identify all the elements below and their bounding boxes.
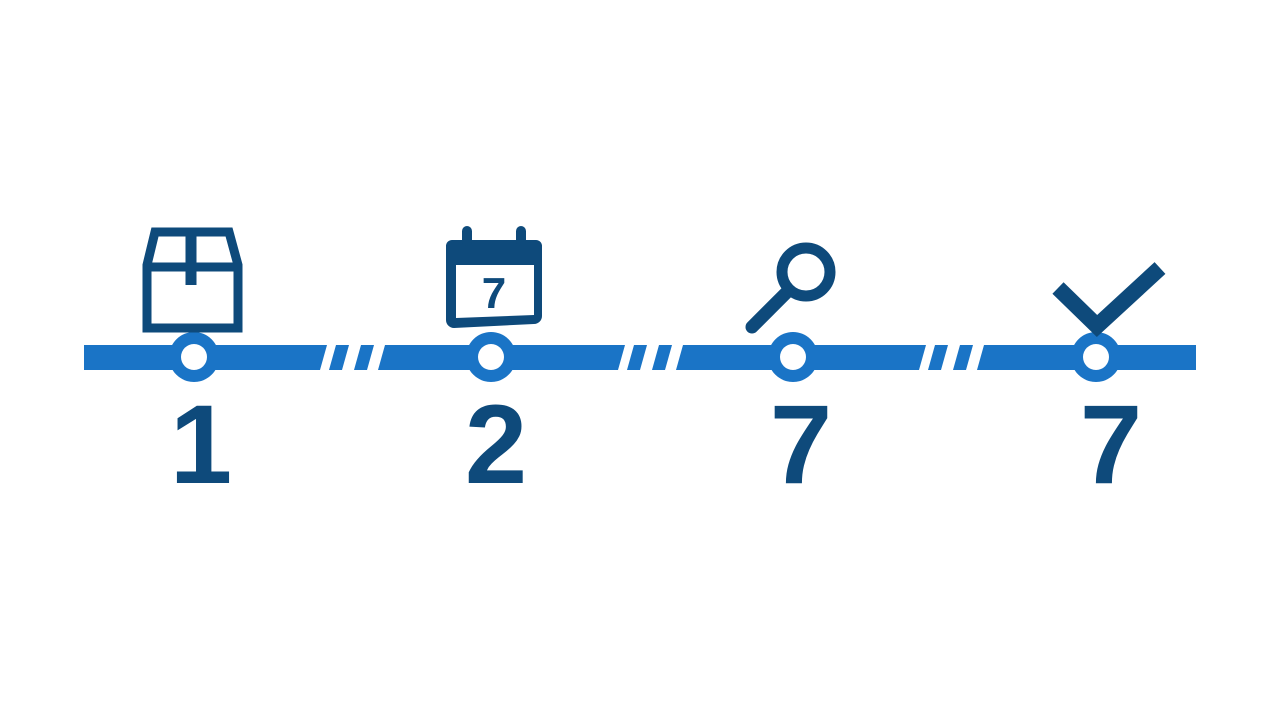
node 2 (466, 332, 516, 382)
icon: magnifier (752, 248, 830, 327)
number 7 (second): 7 (1080, 382, 1142, 507)
number 1: 1 (170, 382, 232, 507)
icon: checkmark (1058, 268, 1160, 326)
node 1 (169, 332, 219, 382)
node 4 (1071, 332, 1121, 382)
number 2: 2 (465, 382, 527, 507)
node 3 (768, 332, 818, 382)
icon: calendar (446, 226, 542, 328)
number 7: 7 (770, 382, 832, 507)
icon: calendar: 7 (482, 269, 506, 318)
icon: box (147, 232, 238, 328)
timeline line (84, 345, 1196, 370)
